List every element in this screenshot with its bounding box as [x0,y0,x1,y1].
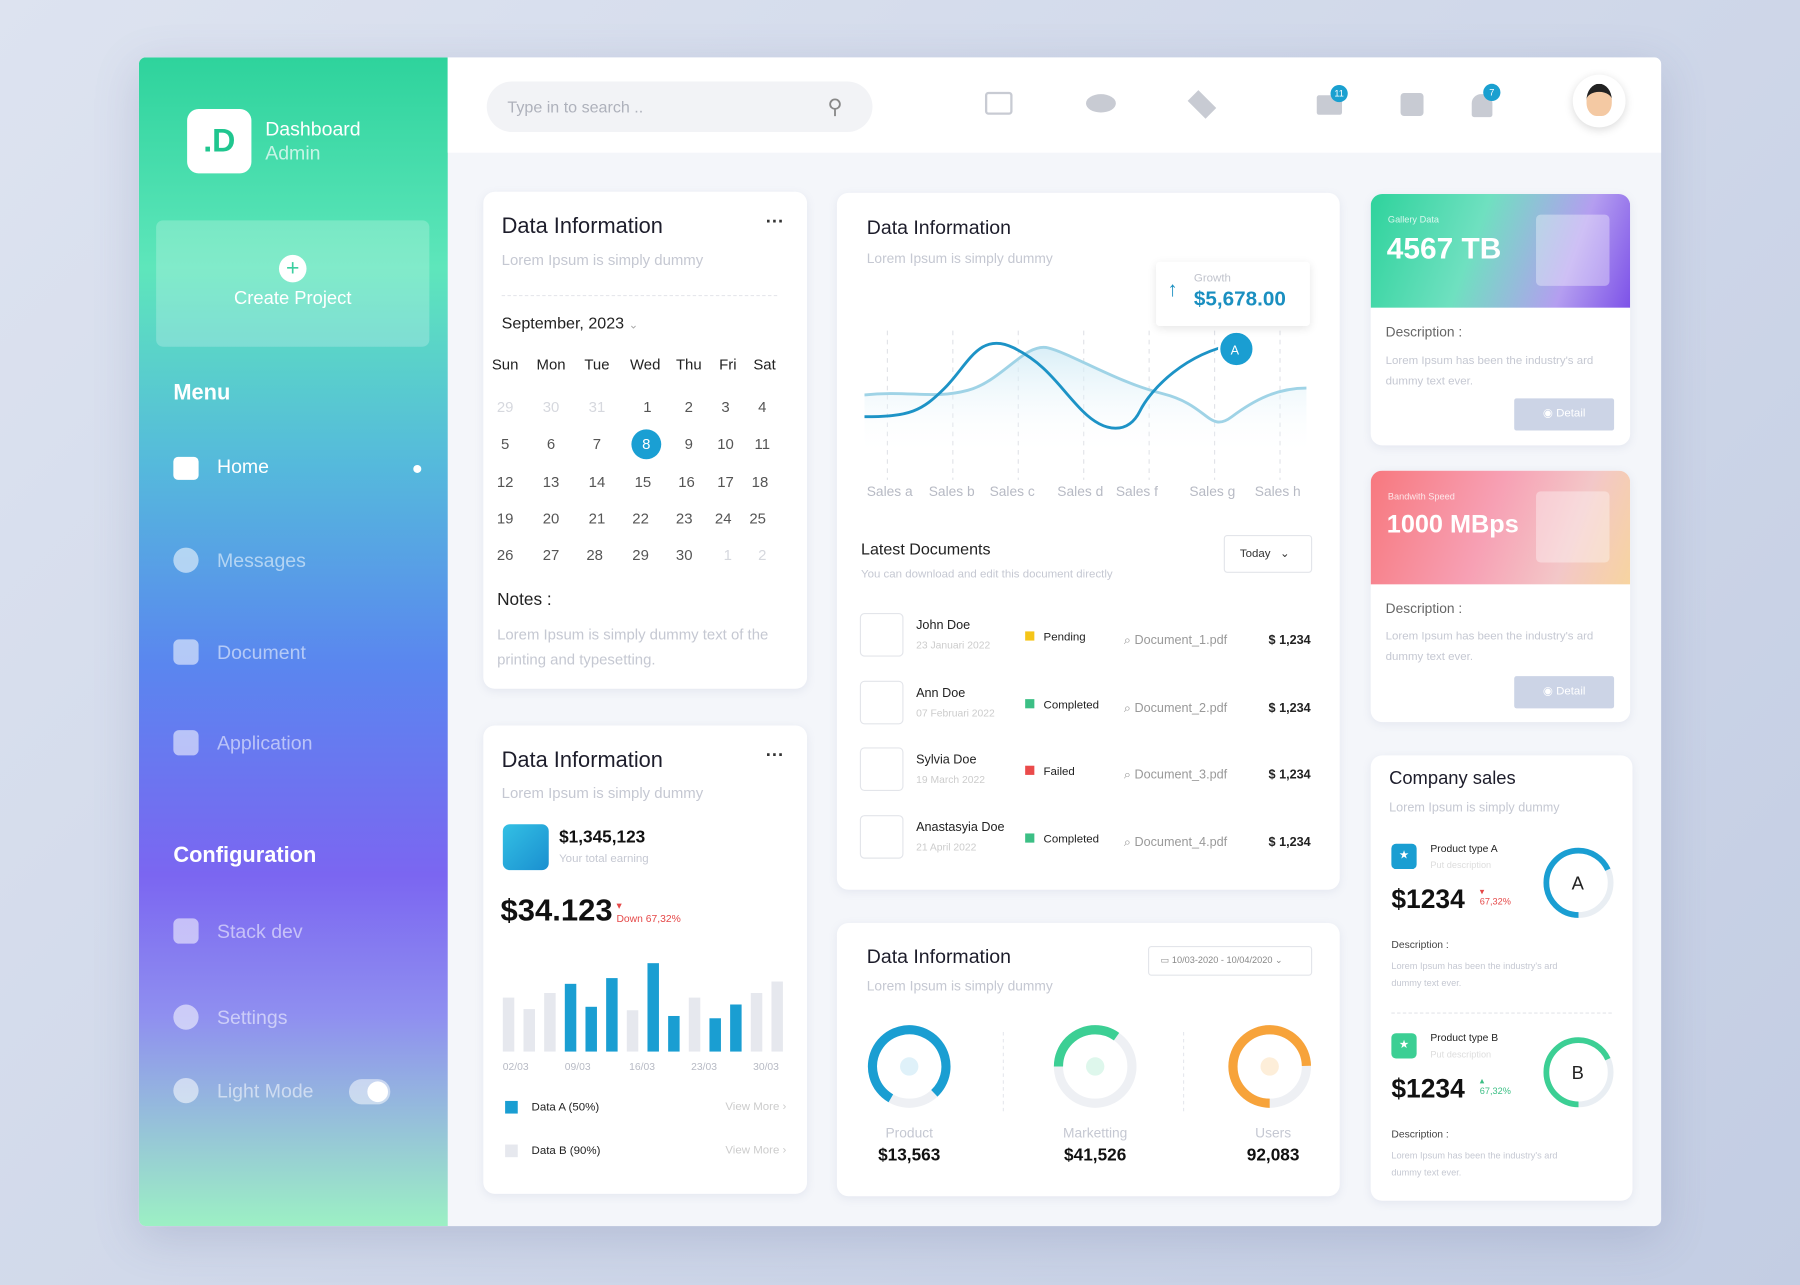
latest documents heading: Latest Documents [861,540,991,558]
nav: home [173,456,422,480]
calendar grid: 18 [752,473,768,490]
product A [1391,844,1417,869]
panel: company sales: Put description [1430,1049,1491,1060]
panel: bandwidth speed: 1000 MBps [1387,510,1519,538]
panel: calendar: Lorem Ipsum is simply dummy text of the printing and typesetting. [497,626,768,668]
document rows: Pending [1044,631,1086,644]
calendar grid: 9 [685,435,693,452]
x-axis labels: Sales d [1057,483,1103,499]
create project button: Create Project [234,289,351,309]
bar chart: 09/03 [565,1062,591,1073]
donut labels: Users [1255,1125,1291,1141]
panel: line chart and documents: Sylvia Doe [916,753,976,767]
nav: home: Home [217,456,269,478]
panel: earnings: Data B (90%) [532,1145,600,1157]
calendar grid: 11 [755,435,770,452]
panel: line chart and documents: 21 April 2022 [916,841,976,853]
panel: line chart and documents: 07 Februari 2022 [916,707,995,719]
panel: line chart and documents: Lorem Ipsum is simply dummy [867,250,1053,266]
calendar grid: 2 [758,546,766,564]
panel: gallery data: Lorem Ipsum has been the industry's ard dummy text ever. [1386,355,1593,388]
nav: settings: Settings [217,1007,288,1029]
panel: company sales [1371,755,1632,1201]
line chart [864,330,1306,480]
panel: line chart and documents [837,193,1340,890]
legend: View More › [725,1101,786,1114]
create project button: + [286,256,299,281]
panel: company sales: Product type A [1430,843,1498,854]
panel: line chart and documents: 19 March 2022 [916,774,985,785]
nav: application: Application [217,732,312,754]
search: ⚲ [827,95,843,118]
panel: gallery data: Gallery Data [1388,215,1439,225]
panel: earnings: Down 67,32% [616,913,681,924]
panel: company sales: $1234 [1391,1073,1465,1103]
panel: company sales: Product type B [1430,1032,1498,1044]
calendar grid: 29 [632,546,649,564]
calendar grid: 8 [642,435,650,452]
panel: earnings: $1,345,123 [559,828,645,847]
calendar grid: 21 [589,510,605,527]
panel: calendar: Data Information [502,215,663,239]
x-axis labels: Sales f [1116,483,1158,499]
calendar grid: 5 [501,435,509,452]
calendar grid: 23 [676,510,693,527]
calendar grid: 3 [721,398,730,416]
panel: company sales: 67,32% [1480,1086,1511,1096]
panel: company sales: A [1572,873,1585,894]
donut labels: $41,526 [1064,1146,1126,1165]
panel: line chart and documents: ⌕ Document_4.pdf [1124,836,1227,850]
panel: company sales: ▴ [1480,1076,1484,1086]
calendar grid: 29 [497,398,513,416]
panel: earnings: Data Information [502,748,663,773]
brand text [265,118,361,164]
panel: earnings: ▾ [616,900,622,912]
header bar [448,57,1661,153]
panel: bandwidth speed: Description : [1386,600,1462,616]
calendar grid: 20 [543,510,559,527]
calendar grid: 14 [589,473,605,490]
search: Type in to search .. [507,98,643,116]
calendar grid: 16 [678,473,695,490]
create project button [156,220,429,347]
calendar grid: Sat [753,356,776,373]
dashboard frame [139,57,1661,1226]
panel: line chart and documents: $ 1,234 [1269,768,1311,782]
x-axis labels: Sales b [929,483,975,499]
calendar grid: 25 [749,510,766,527]
x-axis labels [867,483,1301,499]
menu heading: Menu [173,381,230,405]
donut labels [878,1125,1299,1165]
avatar [1573,75,1626,127]
donut labels: 92,083 [1247,1146,1299,1165]
calendar grid: 12 [497,473,513,490]
document rows [860,613,1311,656]
panel: company sales: ▾ [1480,886,1484,897]
panel: line chart and documents: Anastasyia Doe [916,821,1005,835]
panel: gallery data [1371,194,1630,445]
calendar grid [492,356,776,564]
product B: ★ [1399,1039,1409,1052]
panel: calendar: ··· [766,212,784,232]
sidebar [139,57,448,1226]
calendar grid: 4 [758,398,766,416]
panel: bandwidth speed [1371,471,1630,722]
panel: donut stats: ▭ 10/03-2020 - 10/04/2020 ⌄ [1161,955,1283,965]
x-axis labels: Sales c [990,483,1035,499]
calendar grid: 13 [543,473,559,490]
panel: company sales: 67,32% [1480,897,1511,907]
panel: line chart and documents: You can download and edit this document directly [861,568,1113,581]
calendar grid: 31 [589,398,605,416]
nav: settings [173,1004,288,1030]
brand text: Admin [265,142,321,164]
icon: wallet [503,824,549,870]
nav: document [173,639,306,665]
nav: light mode toggle [173,1078,390,1104]
line chart: A [1231,344,1240,358]
panel: calendar: Lorem Ipsum is simply dummy [502,251,703,269]
panel: gallery data: Description : [1386,324,1462,340]
configuration heading: Configuration [173,844,316,868]
panel: company sales: $1234 [1391,884,1465,914]
calendar grid: 24 [715,510,732,527]
panel: gallery data: 4567 TB [1387,231,1501,265]
panel: line chart and documents: ⌕ Document_3.pdf [1124,768,1227,782]
donut labels: Marketting [1063,1125,1127,1141]
panel: donut stats [837,923,1340,1196]
panel: company sales: Put description [1430,860,1491,870]
nav: document: Document [217,642,306,664]
calendar grid: 26 [497,546,513,564]
panel: earnings: $34.123 [501,893,613,928]
nav: stack dev [173,918,303,944]
product A: ★ [1399,850,1409,862]
calendar grid: Mon [537,356,566,373]
legend: Data A (50%) [532,1101,599,1114]
document rows: John Doe [916,619,970,633]
panel: bandwidth speed: ◉ Detail [1543,685,1585,698]
nav: stack dev: Stack dev [217,921,303,943]
calendar grid: 6 [547,435,555,452]
bar chart: 30/03 [753,1062,779,1073]
panel: bandwidth speed: Lorem Ipsum has been the industry's ard dummy text ever. [1386,630,1593,664]
panel: company sales: Description : [1391,1128,1449,1140]
donuts [868,1025,1311,1112]
calendar grid: 1 [724,546,732,564]
callout: growth: ↑ [1168,278,1178,301]
header bar: 7 [1489,87,1494,98]
calendar grid: Sun [492,356,518,373]
header icons [985,92,1013,115]
product B [1391,1033,1417,1058]
panel: company sales: B [1572,1062,1584,1083]
panel: earnings: ··· [766,746,784,766]
calendar grid: 28 [586,546,603,564]
bar chart: 02/03 [503,1062,529,1073]
panel: earnings: View More › [725,1145,786,1157]
panel: line chart and documents: Completed [1044,833,1099,846]
panel: company sales: Lorem Ipsum has been the industry's ard dummy text ever. [1391,961,1558,988]
x-axis labels: Sales g [1189,483,1235,499]
panel: donut stats: Data Information [867,946,1011,968]
logo: .D [203,123,235,158]
panel: company sales: Company sales [1389,769,1516,789]
calendar grid: Thu [676,356,702,373]
calendar grid: 19 [497,510,513,527]
logo [187,109,251,173]
legend [505,1100,786,1114]
nav: messages [173,548,306,573]
calendar grid: Wed [630,356,660,373]
panel: calendar [483,192,807,689]
panel: line chart and documents: Data Information [867,217,1011,239]
calendar grid: 27 [543,546,559,564]
calendar grid: 15 [635,473,651,490]
header bar: 11 [1334,88,1344,99]
calendar grid: 2 [685,398,693,416]
notes: Notes : [497,590,552,610]
panel: line chart and documents: Failed [1044,766,1075,778]
panel: line chart and documents: $ 1,234 [1269,836,1311,850]
panel: line chart and documents: ⌕ Document_2.pdf [1124,701,1227,715]
calendar grid: 17 [717,473,734,490]
document rows: ⌕ Document_1.pdf [1124,634,1227,647]
callout: growth: $5,678.00 [1194,287,1286,310]
panel: calendar: September, 2023 ⌄ [502,313,638,332]
bar chart: 23/03 [691,1062,717,1073]
x-axis labels: Sales h [1255,483,1301,499]
calendar grid: 1 [643,398,652,416]
bar chart: 16/03 [629,1062,655,1073]
panel: earnings: Lorem Ipsum is simply dummy [502,784,703,801]
calendar grid: 30 [676,546,693,564]
panel: line chart and documents: Today ⌄ [1240,548,1290,560]
document rows: 23 Januari 2022 [916,639,990,651]
nav: application [173,730,312,756]
callout: growth [1156,262,1310,326]
donut labels: $13,563 [878,1146,940,1165]
x-axis labels: Sales a [867,483,913,499]
panel: earnings [483,726,807,1194]
nav: light mode toggle: Light Mode [217,1080,314,1102]
calendar grid: 30 [543,398,559,416]
nav: messages: Messages [217,550,306,572]
panel: company sales: Lorem Ipsum is simply dummy [1389,801,1560,815]
donut labels: Product [885,1125,933,1141]
brand text: Dashboard [265,118,361,140]
calendar grid: Tue [584,356,610,373]
panel: line chart and documents: $ 1,234 [1269,701,1311,715]
calendar grid: 7 [593,435,601,452]
bar chart [502,963,783,1073]
calendar grid: 10 [717,435,734,452]
panel: gallery data: ◉ Detail [1543,408,1585,420]
panel: company sales: Lorem Ipsum has been the industry's ard dummy text ever. [1391,1150,1558,1178]
panel: line chart and documents: Completed [1044,699,1099,712]
search [487,82,872,132]
calendar grid: 22 [632,510,649,527]
panel: company sales: Description : [1391,939,1449,951]
panel: earnings: Your total earning [559,853,649,866]
panel: donut stats: Lorem Ipsum is simply dummy [867,978,1053,994]
panel: line chart and documents: Ann Doe [916,687,965,700]
document rows: $ 1,234 [1269,634,1311,647]
calendar grid: Fri [719,356,737,373]
panel: bandwidth speed: Bandwith Speed [1388,491,1455,502]
callout: growth: Growth [1194,272,1231,285]
